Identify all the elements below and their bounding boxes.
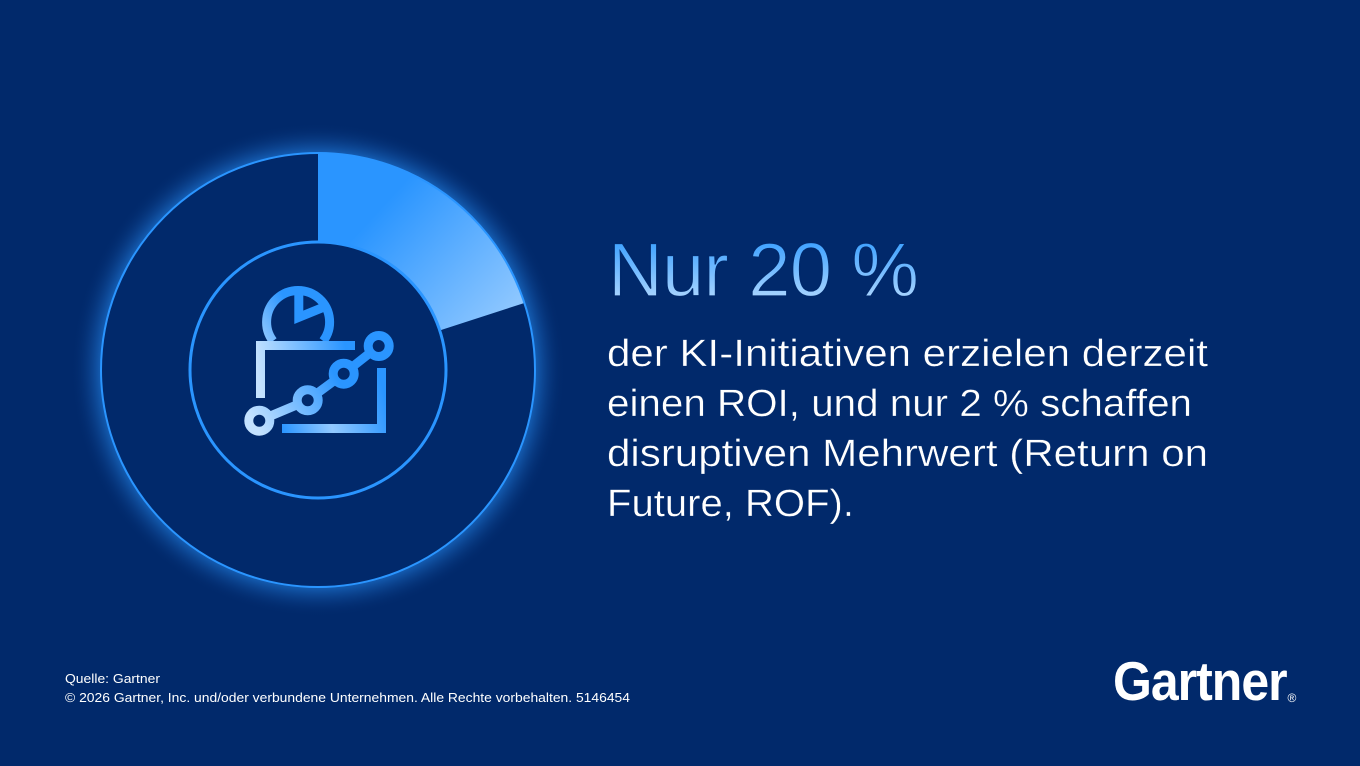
frame — [260, 346, 355, 398]
source note: Quelle: Gartner — [65, 671, 161, 686]
source note: © 2026 Gartner, Inc. und/oder verbundene Unternehmen. Alle Rechte vorbehalten. 5146454 — [65, 690, 630, 705]
donut disc — [101, 153, 535, 587]
body text — [607, 333, 1208, 525]
body text: disruptiven Mehrwert (Return on — [607, 433, 1208, 475]
logo: Gartner: ® — [1288, 691, 1296, 705]
pie symbol — [267, 290, 330, 341]
body text: Future, ROF). — [607, 483, 854, 525]
body text: einen ROI, und nur 2 % schaffen — [607, 383, 1192, 425]
inner ring — [190, 242, 446, 498]
source note — [65, 671, 630, 705]
donut chart: 20 percent — [71, 123, 565, 617]
logo: Gartner: Gartner — [1113, 651, 1287, 713]
body text: der KI-Initiativen erzielen derzeit — [607, 333, 1208, 375]
outer ring — [101, 153, 535, 587]
highlighted 20 % segment — [318, 153, 524, 330]
heading: Nur 20 % — [608, 228, 919, 313]
trend line — [249, 336, 389, 431]
outer glow — [71, 123, 565, 617]
icon: chart with pie and trend line — [249, 290, 389, 431]
